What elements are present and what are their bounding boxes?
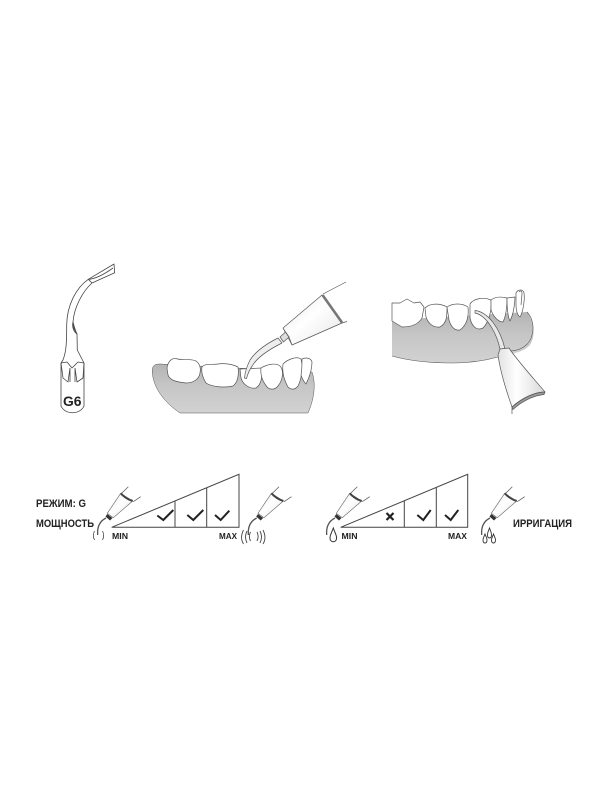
icon: handpiece maximum power xyxy=(242,487,291,544)
label: MAX: MAX xyxy=(219,532,238,541)
tip xyxy=(244,338,282,378)
label: G6: G6 xyxy=(63,394,82,409)
icon: handpiece minimum power xyxy=(93,487,141,540)
icon: G6 ultrasonic tip xyxy=(61,264,115,413)
label: power: МОЩНОСТЬ xyxy=(36,518,94,530)
label: MIN: MIN xyxy=(342,532,358,541)
gum xyxy=(152,364,314,413)
label: MIN: MIN xyxy=(112,532,128,541)
teeth xyxy=(167,358,312,389)
illustration: handpiece on lower teeth, lingual view xyxy=(392,290,545,414)
gum xyxy=(392,312,534,363)
label: mode: РЕЖИМ: G xyxy=(36,498,86,510)
illustration: handpiece on lower teeth, buccal view xyxy=(152,282,347,413)
teeth xyxy=(392,290,524,330)
icon: handpiece minimum irrigation xyxy=(327,487,370,542)
icon: handpiece maximum irrigation xyxy=(482,487,525,543)
label: irrigation: ИРРИГАЦИЯ xyxy=(513,518,572,530)
handpiece body xyxy=(498,348,545,407)
chart: power scale xyxy=(112,474,239,541)
tip xyxy=(475,310,505,349)
handpiece body xyxy=(323,282,346,294)
chart: irrigation scale xyxy=(341,474,468,541)
label: MAX: MAX xyxy=(448,532,468,541)
